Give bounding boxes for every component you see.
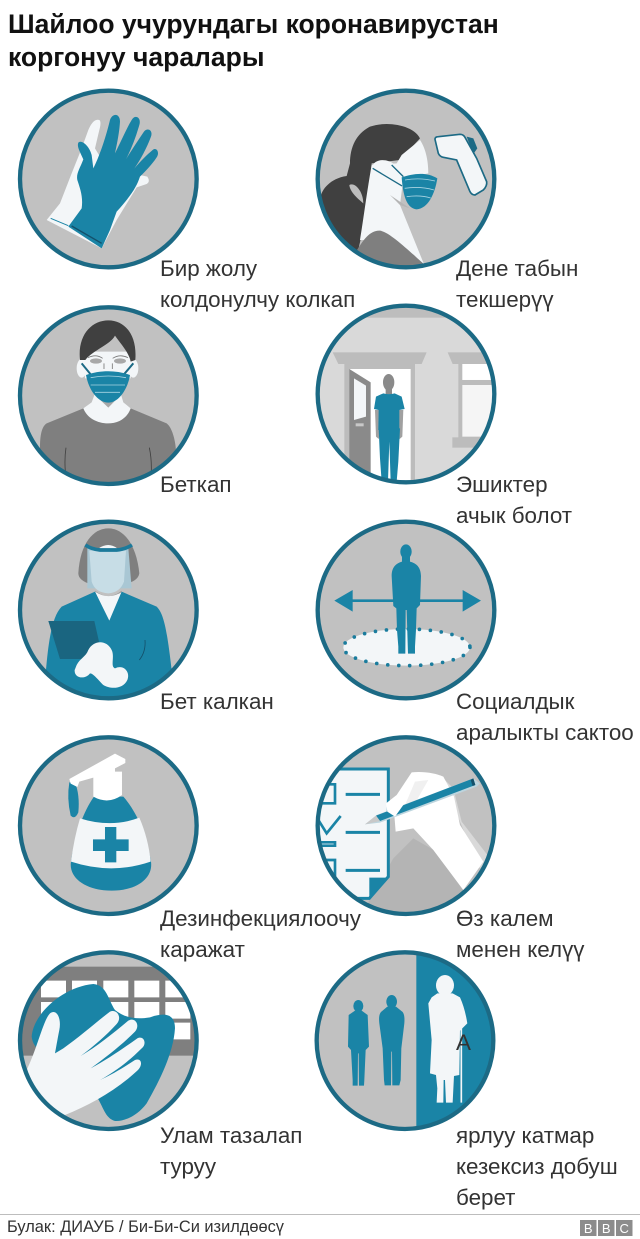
- icon: sanitizer bottle: [20, 737, 197, 914]
- label: open doors: [456, 472, 572, 528]
- title: коргонуу чаралары: [8, 42, 264, 72]
- icon: priority for vulnerable people: [317, 950, 496, 1133]
- logo: BBC: B: [602, 1221, 611, 1236]
- source: Булак: ДИАУБ / Би-Би-Си изилдөөсү: [7, 1218, 285, 1236]
- icon: extra cleaning: [13, 952, 203, 1129]
- icon: face shield: [20, 522, 197, 707]
- title: Шайлоо учурундагы коронавирустан: [8, 9, 499, 39]
- label: disposable gloves: Бир жолу: [160, 256, 258, 281]
- label: bring your own pen: менен келүү: [456, 937, 585, 962]
- title: [8, 9, 499, 72]
- label: bring your own pen: Өз калем: [456, 906, 554, 931]
- label: sanitizer: каражат: [160, 937, 245, 962]
- label: priority: [456, 1123, 618, 1210]
- icon: social distancing: [318, 522, 494, 698]
- logo: BBC: B: [584, 1221, 593, 1236]
- label: priority: кезексиз добуш: [456, 1154, 618, 1179]
- icon: open doors: [313, 302, 500, 485]
- icon: disposable gloves: [20, 91, 197, 267]
- label: disposable gloves: [160, 256, 355, 312]
- label: extra cleaning: [160, 1123, 302, 1179]
- label: open doors: ачык болот: [456, 503, 572, 528]
- label: priority: берет: [456, 1185, 515, 1210]
- stray letter on cane: А: [456, 1030, 471, 1055]
- label: extra cleaning: туруу: [160, 1154, 217, 1179]
- label: face shield: Бет калкан: [160, 689, 274, 714]
- label: sanitizer: Дезинфекциялоочу: [160, 906, 362, 931]
- label: social distancing: Социалдык: [456, 689, 575, 714]
- label: extra cleaning: Улам тазалап: [160, 1123, 302, 1148]
- label: disposable gloves: колдонулчу колкап: [160, 287, 355, 312]
- logo: BBC: [580, 1220, 632, 1236]
- label: social distancing: [456, 689, 634, 745]
- label: priority: ярлуу катмар: [456, 1123, 594, 1148]
- label: bring your own pen: [456, 906, 585, 962]
- label: open doors: Эшиктер: [456, 472, 548, 497]
- label: temperature check: [456, 256, 578, 312]
- label: sanitizer: [160, 906, 362, 962]
- label: temperature check: текшерүү: [456, 287, 554, 312]
- label: face mask: Беткап: [160, 472, 232, 497]
- icon: face mask: [20, 307, 197, 492]
- logo: BBC: C: [620, 1221, 629, 1236]
- label: temperature check: Дене табын: [456, 256, 578, 281]
- icon: bring your own pen: [313, 737, 494, 925]
- icon: temperature check: [318, 91, 494, 277]
- label: social distancing: аралыкты сактоо: [456, 720, 634, 745]
